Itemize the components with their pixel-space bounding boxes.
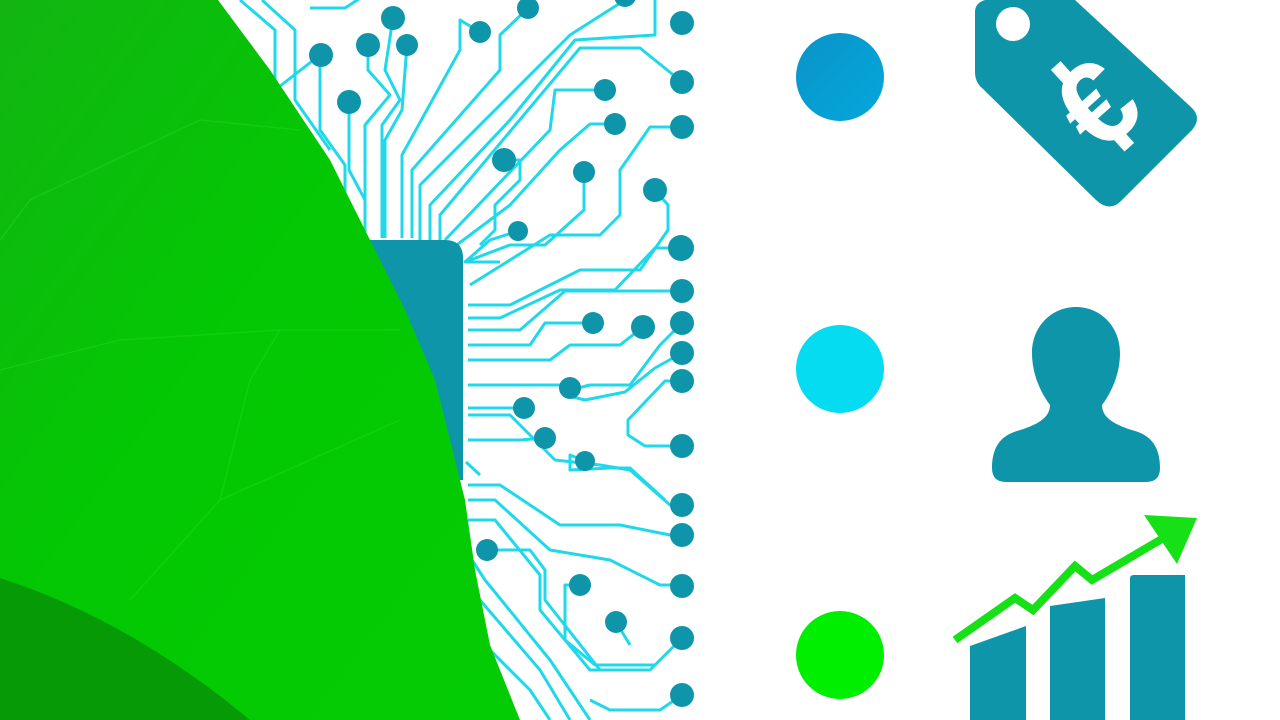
euro symbol: €	[1028, 34, 1165, 176]
icon: euro price tag	[975, 0, 1197, 206]
lower leaf fold	[0, 578, 250, 720]
arrow	[955, 533, 1172, 640]
circuit terminal dots	[309, 0, 694, 707]
legend dot: blue	[796, 33, 884, 121]
circuit board traces	[240, 0, 682, 720]
green leaf	[0, 0, 520, 720]
icon: growth bar chart with arrow	[955, 515, 1197, 720]
bars	[970, 575, 1185, 720]
microchip	[360, 240, 463, 480]
legend dot: cyan	[796, 325, 884, 413]
leaf veins	[0, 120, 400, 600]
icon: person	[992, 307, 1160, 482]
legend dot: green	[796, 611, 884, 699]
arrowhead	[1144, 515, 1197, 564]
